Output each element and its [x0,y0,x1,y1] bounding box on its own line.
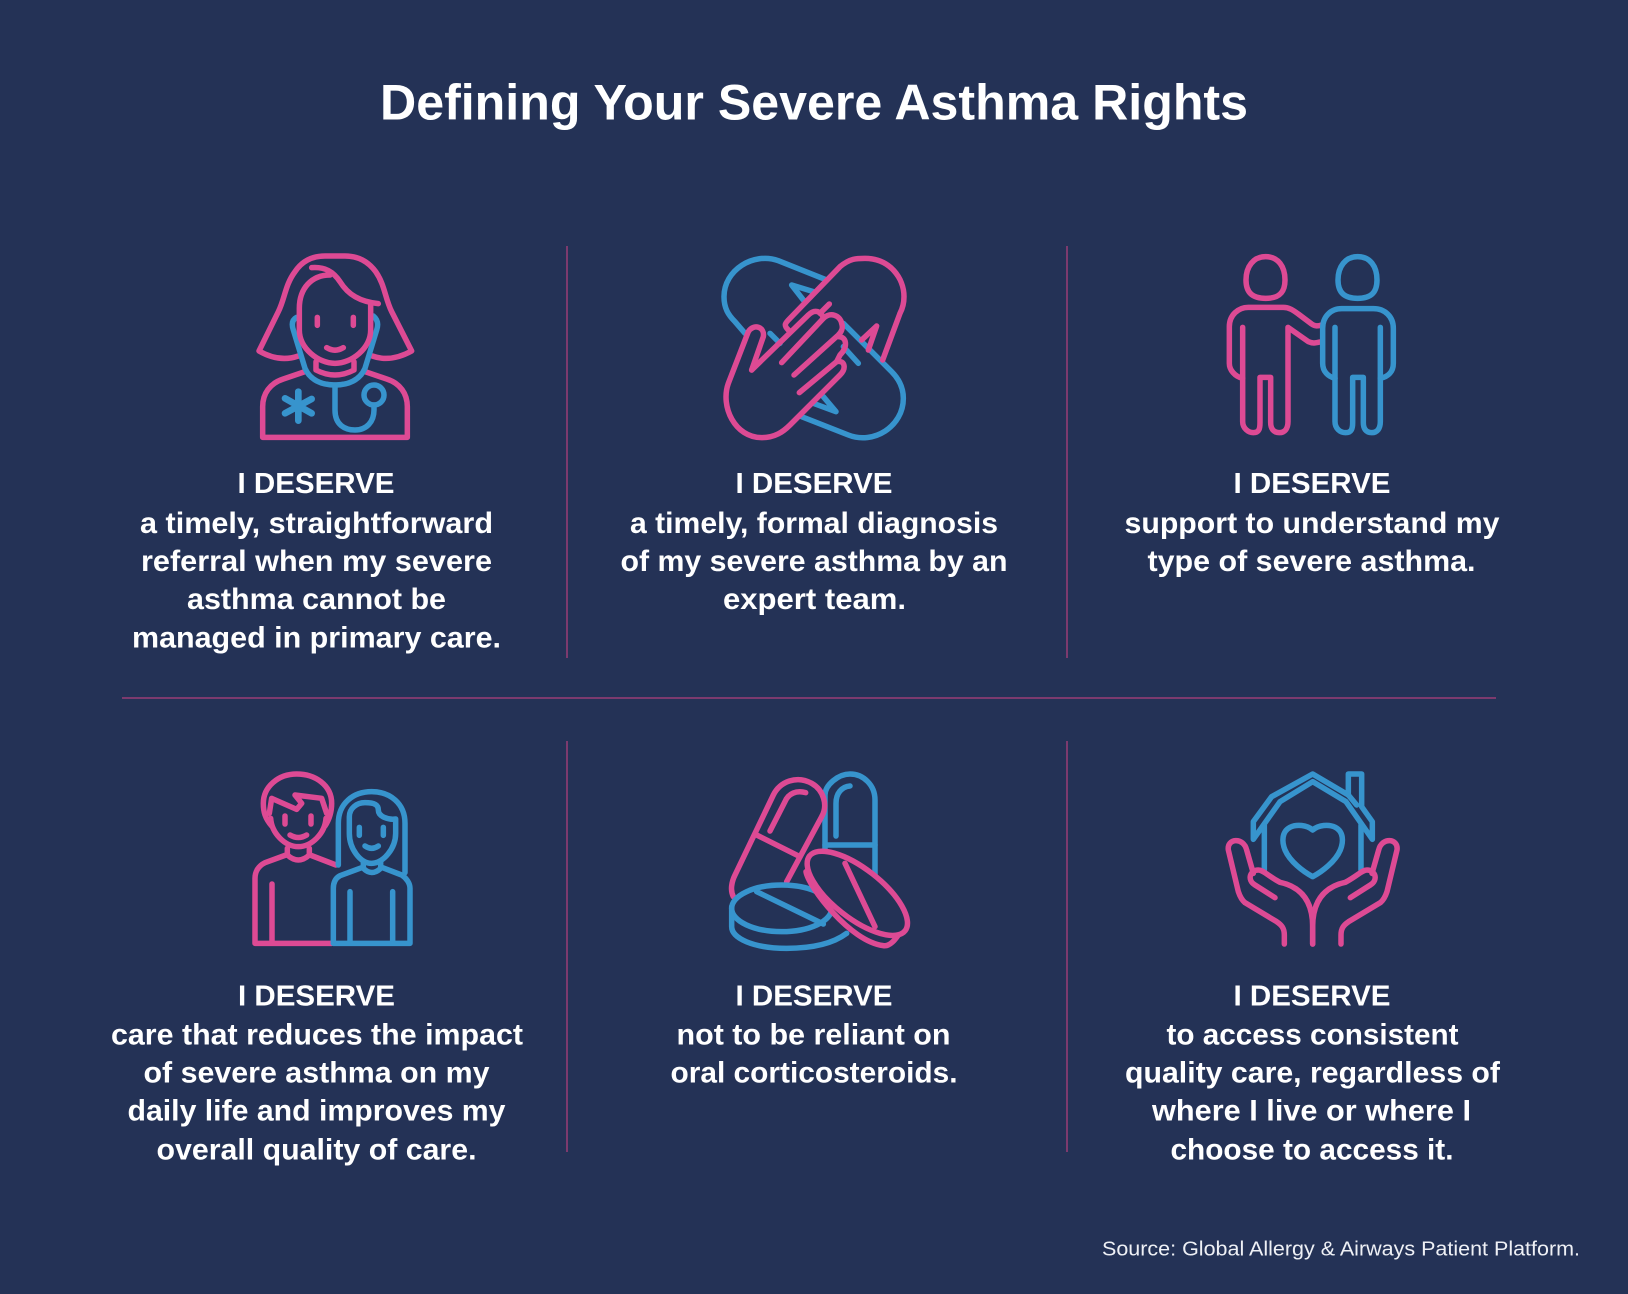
text: right 6: choose to access it. [1170,1134,1454,1166]
text: right 6: quality care, regardless of [1125,1056,1501,1089]
text: right 2: I DESERVE [736,468,892,500]
text: right 3 [1124,468,1500,578]
text: right 1: a timely, straightforward [140,507,493,540]
icon: hands holding home [1228,774,1397,944]
text: right 5: oral corticosteroids. [670,1056,958,1089]
text: right 4: I DESERVE [238,980,395,1012]
text: right 3: I DESERVE [1234,468,1390,500]
icon: doctor with stethoscope [259,256,412,437]
text: right 6: I DESERVE [1234,980,1390,1012]
icon: pills and tablets [732,774,920,950]
text: right 4: overall quality of care. [156,1134,476,1166]
text: right 2 [620,468,1008,616]
text: right 1: referral when my severe [141,545,492,578]
text: right 3: type of severe asthma. [1148,545,1476,578]
text: right 5: not to be reliant on [676,1018,950,1052]
text: right 6: to access consistent [1166,1018,1459,1052]
text: right 1: I DESERVE [238,468,394,500]
text: right 4: of severe asthma on my [144,1056,490,1089]
text: right 1: asthma cannot be [187,583,446,616]
title: Defining Your Severe Asthma Rights [380,74,1248,130]
text: right 2: of my severe asthma by an [620,545,1008,578]
text: right 6 [1125,980,1501,1166]
icon: hands over plaster [724,258,904,438]
text: right 3: support to understand my [1124,507,1500,540]
text: right 4: care that reduces the impact [111,1018,523,1052]
icon: two people supporting [1229,257,1393,433]
text: right 4 [111,980,523,1166]
text: right 4: daily life and improves my [128,1095,506,1128]
icon: couple [255,774,410,943]
text: right 2: a timely, formal diagnosis [630,507,998,540]
source note: Source: Global Allergy & Airways Patient Platform. [1102,1239,1580,1261]
text: right 6: where I live or where I [1151,1095,1471,1128]
text: right 2: expert team. [723,583,906,616]
text: right 1 [132,468,501,654]
text: right 1: managed in primary care. [132,622,501,654]
text: right 5 [670,980,958,1089]
text: right 5: I DESERVE [736,980,892,1012]
